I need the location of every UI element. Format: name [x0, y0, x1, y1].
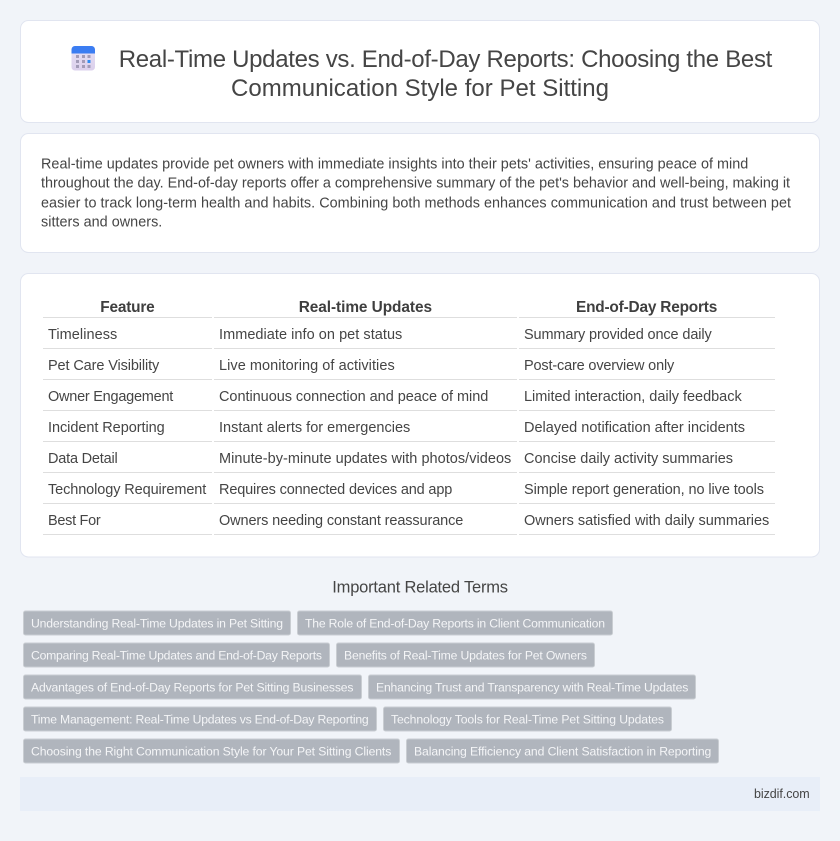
- table header: Feature: [100, 299, 155, 316]
- tag: Benefits of Real-Time Updates for Pet Owners: [344, 648, 587, 662]
- tag: [24, 643, 330, 667]
- intro text: easier to track long-term health and habits. Combining both methods enhances communication and trust between pet: [41, 195, 791, 211]
- row: Timeliness: Timeliness: [48, 327, 117, 343]
- row: Timeliness: [48, 327, 712, 343]
- tag: [24, 707, 376, 731]
- intro text: sitters and owners.: [41, 214, 162, 230]
- tag: Advantages of End-of-Day Reports for Pet Sitting Businesses: [31, 680, 354, 694]
- tag: Time Management: Real-Time Updates vs End-of-Day Reporting: [31, 712, 369, 726]
- panel: header: [20, 20, 820, 122]
- panel: related term tags: [24, 611, 718, 763]
- row: Data Detail: [48, 451, 733, 467]
- footer: bizdif.com: [754, 787, 810, 801]
- row: Technology Requirement: [48, 482, 764, 498]
- table header: [100, 299, 717, 316]
- tag: Comparing Real-Time Updates and End-of-Day Reports: [31, 648, 322, 662]
- row: Data Detail: Minute-by-minute updates with photos/videos: [219, 451, 511, 467]
- row: Owner Engagement: Continuous connection and peace of mind: [219, 389, 488, 405]
- row: Incident Reporting: Delayed notification after incidents: [524, 420, 745, 436]
- row: Timeliness: Summary provided once daily: [524, 327, 712, 343]
- tag: [24, 611, 290, 635]
- tag: Choosing the Right Communication Style for Your Pet Sitting Clients: [31, 744, 391, 758]
- row: Technology Requirement: Technology Requirement: [48, 482, 206, 498]
- row: Technology Requirement: Simple report generation, no live tools: [524, 482, 764, 498]
- row: Technology Requirement: Requires connected devices and app: [219, 482, 452, 498]
- tag: Technology Tools for Real-Time Pet Sitting Updates: [391, 712, 664, 726]
- tag: [24, 675, 362, 699]
- row: Incident Reporting: Instant alerts for emergencies: [219, 420, 410, 436]
- title: [119, 46, 773, 102]
- heading: related terms: Important Related Terms: [332, 579, 508, 597]
- title: Real-Time Updates vs. End-of-Day Reports: Choosing the Best: [119, 46, 773, 73]
- tag: [368, 675, 696, 699]
- row: Incident Reporting: [48, 420, 745, 436]
- row: Best For: Owners needing constant reassurance: [219, 513, 463, 529]
- icon: calendar: [72, 46, 95, 70]
- title: Communication Style for Pet Sitting: [231, 75, 609, 102]
- tag: [298, 611, 612, 635]
- row: Pet Care Visibility: Live monitoring of activities: [219, 358, 395, 374]
- row: Owner Engagement: Owner Engagement: [48, 389, 173, 405]
- row: Data Detail: Concise daily activity summaries: [524, 451, 733, 467]
- row: Owner Engagement: [48, 389, 742, 405]
- panel: introduction: [20, 134, 820, 252]
- row: Owner Engagement: Limited interaction, daily feedback: [524, 389, 742, 405]
- tag: [24, 739, 400, 763]
- intro text: [41, 156, 791, 230]
- tag: [406, 739, 718, 763]
- tag: Balancing Efficiency and Client Satisfaction in Reporting: [414, 744, 711, 758]
- intro text: Real-time updates provide pet owners with immediate insights into their pets' activities, ensuring peace of mind: [41, 156, 748, 172]
- footer: [20, 777, 820, 811]
- row: Pet Care Visibility: [48, 358, 675, 374]
- row: Pet Care Visibility: Post-care overview only: [524, 358, 675, 374]
- tag: Enhancing Trust and Transparency with Real-Time Updates: [376, 680, 688, 694]
- tag: [336, 643, 594, 667]
- row: Best For: [48, 513, 769, 529]
- row: Best For: Best For: [48, 513, 101, 529]
- panel: comparison table: [20, 274, 820, 557]
- row: Pet Care Visibility: Pet Care Visibility: [48, 358, 160, 374]
- intro text: throughout the day. End-of-day reports offer a comprehensive summary of the pet's behavior and well-being, making it: [41, 175, 790, 191]
- tag: The Role of End-of-Day Reports in Client Communication: [305, 616, 605, 630]
- row: Data Detail: Data Detail: [48, 451, 118, 467]
- tag: [384, 707, 672, 731]
- row: Incident Reporting: Incident Reporting: [48, 420, 165, 436]
- table header: Real-time Updates: [299, 299, 432, 316]
- table header: End-of-Day Reports: [576, 299, 717, 316]
- row: Timeliness: Immediate info on pet status: [219, 327, 402, 343]
- row: Best For: Owners satisfied with daily summaries: [524, 513, 769, 529]
- tag: Understanding Real-Time Updates in Pet Sitting: [31, 616, 283, 630]
